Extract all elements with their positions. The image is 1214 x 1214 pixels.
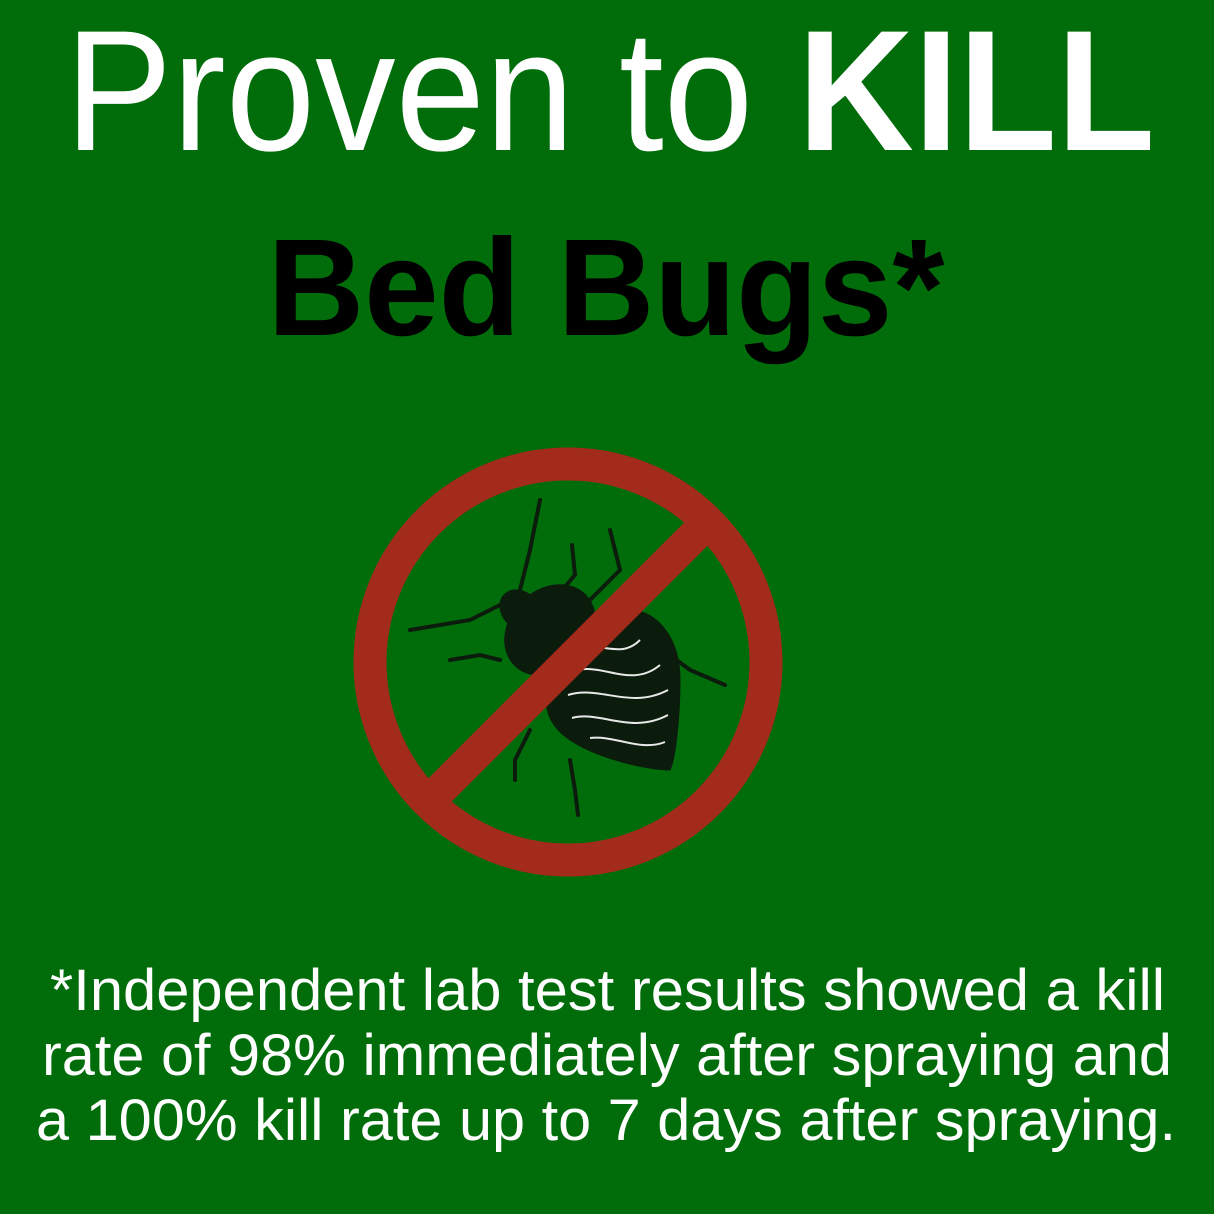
- title: Proven to KILL: [65, 0, 1155, 187]
- footnote: rate of 98% immediately after spraying and: [42, 1023, 1172, 1088]
- footnote: a 100% kill rate up to 7 days after spraying.: [36, 1088, 1176, 1153]
- footnote: [36, 958, 1176, 1153]
- icon: bed bug: [410, 500, 725, 815]
- subtitle: Bed Bugs*: [268, 211, 945, 365]
- footnote: *Independent lab test results showed a kill: [50, 958, 1165, 1023]
- icon: prohibition sign: [370, 464, 766, 860]
